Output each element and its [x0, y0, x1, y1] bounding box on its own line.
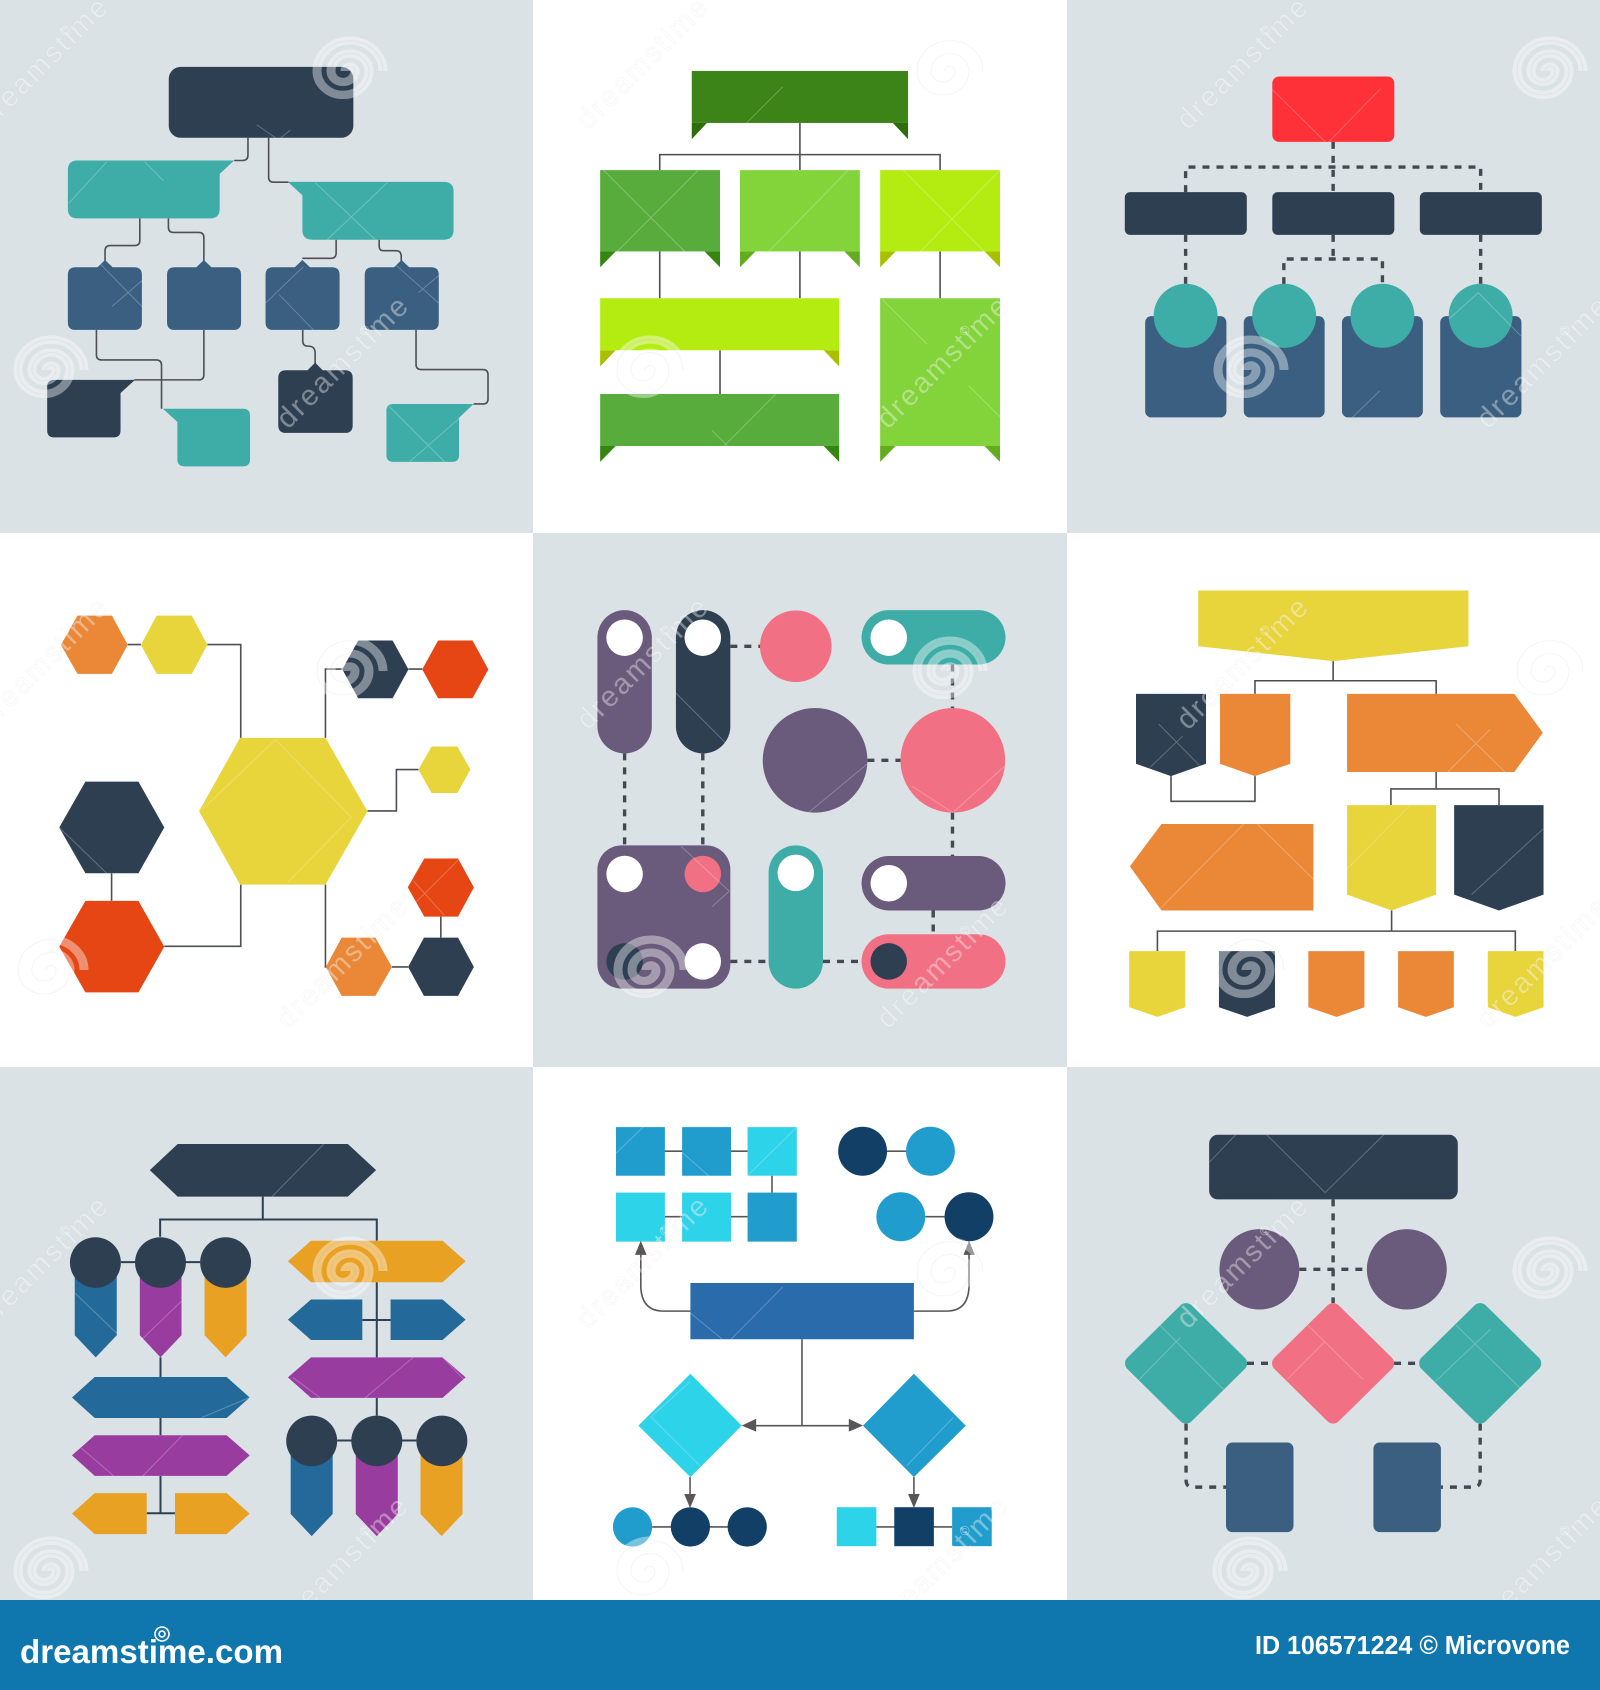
image id and author credit: ID 106571224 © Microvone [1255, 1632, 1570, 1660]
watermark text: dreamstime [570, 1191, 715, 1335]
teal circles [1154, 284, 1513, 348]
square grid [616, 1127, 797, 1242]
watermark copyright marks: © [1560, 1523, 1570, 1538]
long arrow: purple [72, 1435, 250, 1476]
watermark text: dreamstime [270, 891, 415, 1035]
dark tip box [278, 363, 353, 433]
central blue box [690, 1283, 914, 1339]
connectors [121, 1197, 416, 1513]
ribbon row: mid green [600, 170, 720, 267]
watermark copyright marks: © [1560, 323, 1570, 338]
shield: orange [1220, 694, 1290, 776]
hexagon: red lower right [408, 858, 474, 917]
watermark copyright marks: © [660, 1223, 670, 1238]
top ribbon [692, 71, 908, 139]
wide ribbon: lime [600, 298, 839, 366]
pennants right [291, 1441, 463, 1536]
purple circles [1219, 1229, 1447, 1310]
long arrow: amber [288, 1241, 466, 1282]
long arrow: purple right [288, 1357, 466, 1398]
panel: dashed rounded diamonds [1067, 1067, 1600, 1600]
hexagon: dark top right [342, 640, 408, 698]
watermark text: dreamstime [270, 291, 415, 435]
arrow box: right [1347, 694, 1543, 772]
footer banner [0, 1600, 1600, 1690]
watermark text: dreamstime [570, 592, 715, 736]
panel: shields and arrow boxes [1067, 533, 1600, 1067]
teal bubble right [288, 182, 454, 240]
teal bubble lower right [386, 404, 474, 462]
brand wordmark: dreamstime.com [20, 1633, 283, 1670]
watermark text: dreamstime [870, 291, 1015, 435]
blue tip boxes [68, 260, 439, 330]
wide ribbon: green [600, 394, 839, 462]
watermark text: dreamstime [870, 1491, 1015, 1635]
watermark copyright marks: © [1260, 1223, 1270, 1238]
arrowheads [635, 1241, 975, 1508]
watermark copyright marks: © [60, 1223, 70, 1238]
hexagon: orange lower [326, 938, 392, 996]
connectors [112, 645, 441, 967]
circles right [286, 1416, 467, 1466]
watermark copyright marks: © [60, 623, 70, 638]
circles left [70, 1237, 251, 1288]
ribbon row: light green [740, 170, 860, 267]
watermark copyright marks: © [960, 323, 970, 338]
panel: green ribbon hierarchy [533, 0, 1067, 533]
teal bubble lower [163, 409, 250, 466]
vertical pill: purple [597, 610, 652, 753]
watermark copyright marks: © [960, 923, 970, 938]
watermark copyright marks: © [1260, 623, 1270, 638]
ribbon row: lime [880, 170, 1000, 267]
diamond: blue [863, 1374, 966, 1477]
blue cards [1145, 316, 1521, 417]
rounded square with dots [597, 845, 730, 989]
icon: brand spiral [155, 1627, 169, 1641]
panel: blue squares, circles and diamonds [533, 1067, 1067, 1600]
tall ribbon [880, 298, 1000, 462]
panel: dashed hierarchy with circles and cards [1067, 0, 1600, 533]
watermark text: dreamstime [270, 1491, 415, 1635]
diamond: cyan [638, 1374, 742, 1477]
circle: pink large [900, 708, 1005, 813]
rounded diamonds [1133, 1311, 1533, 1416]
connectors [96, 138, 488, 409]
dashed connectors [1186, 1199, 1480, 1487]
hexagon: large yellow centre [199, 738, 367, 885]
watermark text: dreamstime [1170, 1191, 1315, 1335]
top dark arrow box [150, 1144, 376, 1197]
connectors [641, 1151, 969, 1527]
pennants left [75, 1263, 247, 1357]
circle: pink small [760, 610, 832, 682]
connectors [660, 123, 940, 394]
dashed connectors [1186, 142, 1481, 284]
watermark copyright marks: © [1560, 923, 1570, 938]
hexagon: red top right [422, 640, 488, 698]
dark bubble [47, 380, 135, 437]
watermark text: dreamstime [1170, 592, 1315, 736]
small shields row [1129, 951, 1544, 1017]
hexagon: small yellow [418, 747, 470, 793]
watermark copyright marks: © [660, 23, 670, 38]
split arrows: blue [288, 1299, 466, 1340]
top dark box [1209, 1135, 1458, 1199]
panel: pennants and long arrows [0, 1067, 533, 1600]
circle pair lower [876, 1192, 993, 1241]
circles bottom [613, 1507, 767, 1547]
horizontal pill: teal [862, 610, 1006, 665]
shield: yellow large [1347, 805, 1436, 910]
panel: curved connector flowchart with speech-bubble boxes [0, 0, 533, 533]
connectors [1157, 661, 1515, 951]
circle: purple large [763, 708, 867, 813]
panel: hexagon network [0, 533, 533, 1067]
squares bottom [837, 1507, 992, 1546]
shield: dark [1136, 694, 1206, 776]
watermark text: dreamstime [870, 891, 1015, 1035]
hexagon: red left [59, 901, 164, 992]
top box [169, 67, 353, 138]
arrow box: left [1130, 824, 1313, 910]
circle pair top [838, 1127, 955, 1176]
watermark copyright marks: © [660, 623, 670, 638]
watermark copyright marks: © [360, 323, 370, 338]
dashed connectors [625, 646, 952, 961]
top yellow banner [1198, 591, 1468, 661]
hexagon: orange top [61, 616, 128, 674]
hexagon: dark lower right [408, 938, 474, 996]
split arrows: amber [72, 1493, 250, 1534]
dark boxes [1125, 192, 1542, 235]
horizontal pill: pink [862, 934, 1006, 989]
watermark copyright marks: © [360, 1523, 370, 1538]
watermark copyright marks: © [360, 923, 370, 938]
shield: dark large [1454, 805, 1544, 910]
red top box [1272, 76, 1394, 142]
blue rounded boxes [1226, 1443, 1441, 1532]
hexagon: yellow top [141, 616, 207, 674]
horizontal pill: purple [862, 856, 1006, 910]
vertical pill: teal [769, 845, 823, 989]
vertical pill: dark [676, 610, 730, 753]
hexagon: dark left [59, 782, 164, 873]
long arrow: blue [72, 1377, 250, 1418]
watermark copyright marks: © [960, 1523, 970, 1538]
teal bubble left [68, 160, 234, 218]
watermark copyright marks: © [1260, 23, 1270, 38]
panel: pills and circles [533, 533, 1067, 1067]
watermark copyright marks: © [60, 23, 70, 38]
